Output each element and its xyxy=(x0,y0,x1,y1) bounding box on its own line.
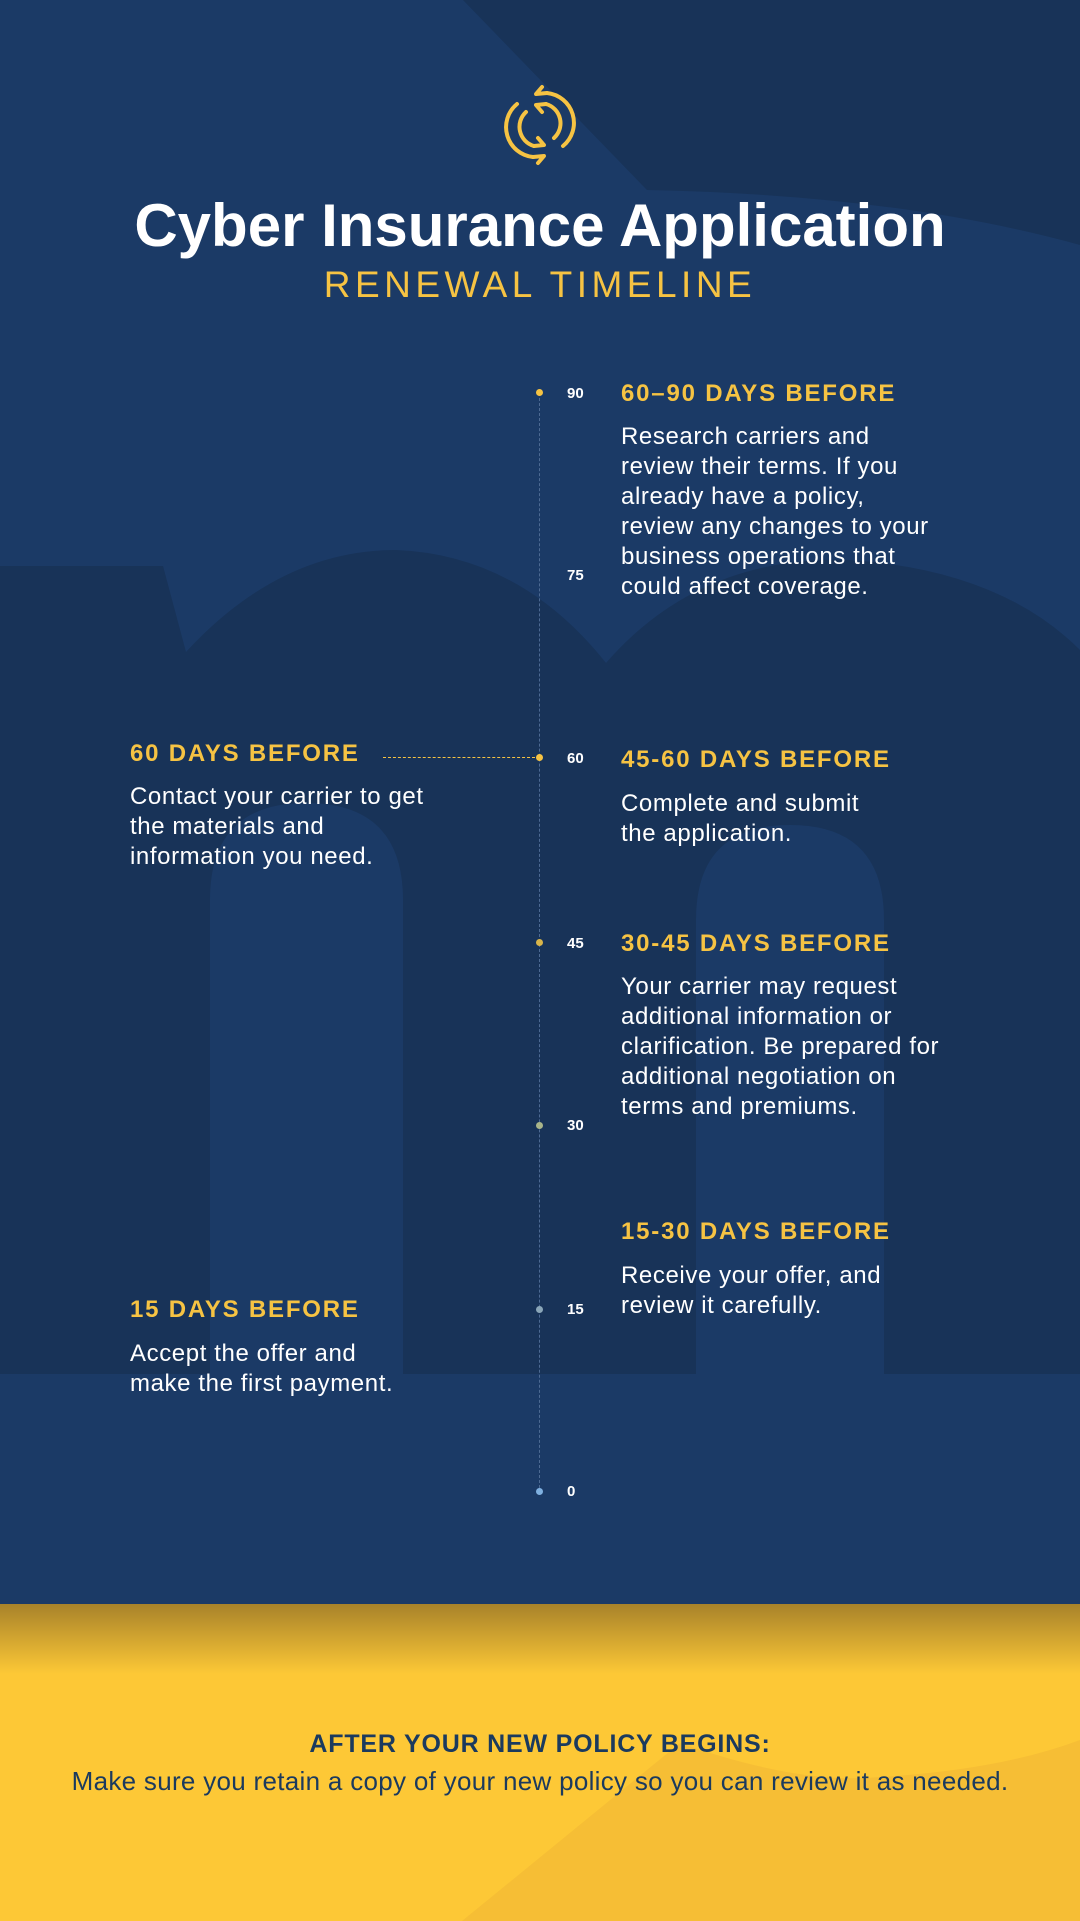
step: 30-45 days: 30-45 DAYS BEFORE xyxy=(621,930,891,957)
timeline ticks: 45 xyxy=(567,935,584,952)
connector dashed line xyxy=(383,757,535,758)
step: 30-45 days: clarification. Be prepared for xyxy=(621,1033,939,1060)
timeline ticks: 0 xyxy=(567,1483,575,1500)
step: 60-90 days: business operations that xyxy=(621,543,896,570)
step: 30-45 days: terms and premiums. xyxy=(621,1093,858,1120)
step: 60 days: Contact your carrier to get xyxy=(130,783,424,810)
step: 30-45 days: additional information or xyxy=(621,1003,892,1030)
step: 60 days: information you need. xyxy=(130,843,373,870)
footer text: Make sure you retain a copy of your new policy so you can review it as needed. xyxy=(72,1766,1008,1796)
step: 60-90 days: Research carriers and xyxy=(621,423,870,450)
step: 60-90 days xyxy=(621,380,929,600)
step: 60-90 days: review any changes to your xyxy=(621,513,929,540)
step: 60 days: 60 DAYS BEFORE xyxy=(130,740,360,767)
step: 60 days: the materials and xyxy=(130,813,324,840)
step: 30-45 days xyxy=(621,930,939,1120)
step: 15-30 days xyxy=(621,1218,891,1319)
footer heading: AFTER YOUR NEW POLICY BEGINS: xyxy=(309,1730,771,1758)
step: 15-30 days: review it carefully. xyxy=(621,1292,822,1319)
step: 60-90 days: could affect coverage. xyxy=(621,573,869,600)
step: 30-45 days: Your carrier may request xyxy=(621,973,897,1000)
step: 45-60 days xyxy=(621,746,891,847)
step: 15 days xyxy=(130,1296,393,1397)
icon: renewal arrows xyxy=(504,84,576,166)
step: 45-60 days: Complete and submit xyxy=(621,790,859,817)
step: 15-30 days: Receive your offer, and xyxy=(621,1262,881,1289)
timeline ticks: 30 xyxy=(567,1117,584,1134)
step: 30-45 days: additional negotiation on xyxy=(621,1063,896,1090)
step: 60-90 days: 60–90 DAYS BEFORE xyxy=(621,380,896,407)
step: 45-60 days: 45-60 DAYS BEFORE xyxy=(621,746,891,773)
title: Cyber Insurance Application xyxy=(134,192,946,259)
timeline ticks: 75 xyxy=(567,567,584,584)
step: 60-90 days: review their terms. If you xyxy=(621,453,898,480)
step: 45-60 days: the application. xyxy=(621,820,792,847)
step: 60-90 days: already have a policy, xyxy=(621,483,865,510)
subtitle: RENEWAL TIMELINE xyxy=(324,264,756,305)
timeline axis xyxy=(539,393,540,1493)
timeline ticks: 15 xyxy=(567,1301,584,1318)
step: 15 days: Accept the offer and xyxy=(130,1340,356,1367)
step: 60 days xyxy=(130,740,424,870)
timeline ticks xyxy=(536,385,584,1500)
step: 15-30 days: 15-30 DAYS BEFORE xyxy=(621,1218,891,1245)
step: 15 days: 15 DAYS BEFORE xyxy=(130,1296,360,1323)
timeline ticks: 90 xyxy=(567,385,584,402)
step: 15 days: make the first payment. xyxy=(130,1370,393,1397)
timeline ticks: 60 xyxy=(567,750,584,767)
